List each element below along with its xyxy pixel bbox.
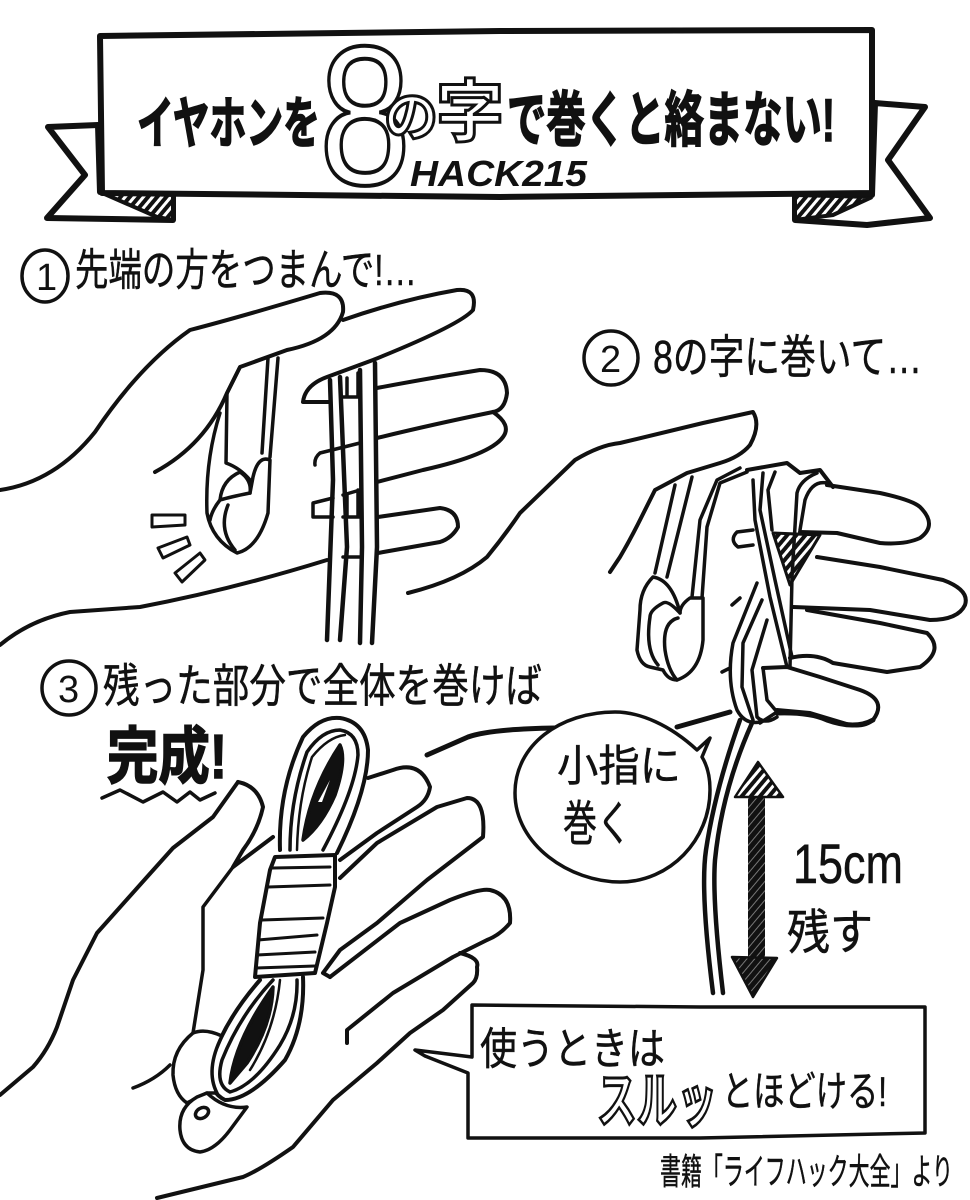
index finger <box>303 290 474 402</box>
wound cord strands <box>753 472 827 667</box>
step 1 illustration: hand pinching earphone <box>0 290 507 645</box>
finger stubs between cords <box>313 373 360 557</box>
double arrow: 15 cm length <box>732 762 783 997</box>
step number circle <box>22 250 68 302</box>
banner main panel <box>100 30 872 197</box>
hand back and thumb <box>408 412 756 593</box>
earphone bud hole <box>193 1105 211 1121</box>
step number: 3 <box>58 669 79 711</box>
index finger <box>800 485 929 543</box>
callout big word: スルッ <box>597 1068 717 1135</box>
earphone cords <box>226 358 278 480</box>
ring finger <box>790 610 935 672</box>
step 2 illustration: hand with figure eight winding <box>408 412 966 993</box>
callout bubble <box>515 712 710 882</box>
middle finger <box>323 798 483 977</box>
thumb and arm <box>0 782 238 1095</box>
earphone cords <box>655 468 747 598</box>
banner left fold shading <box>100 192 173 220</box>
wrapped band <box>255 855 335 977</box>
callout panel <box>415 1005 925 1138</box>
little finger <box>763 667 878 725</box>
hack number: HACK215 <box>410 153 588 194</box>
lower wound loop <box>210 977 303 1100</box>
hatched gap between fingers <box>773 533 820 585</box>
palm inner edge <box>193 867 233 1033</box>
step text: 残った部分で全体を巻けば <box>103 660 542 712</box>
step 3 illustration: hand holding wound earphone <box>0 718 510 1198</box>
banner left ribbon tail <box>47 125 173 220</box>
earphone bud front <box>180 1093 247 1152</box>
title outlined ji: 字 <box>436 75 504 151</box>
upper wound loop <box>280 718 368 853</box>
ring finger <box>377 412 506 482</box>
callout: little finger <box>515 712 710 882</box>
callout line 1: 使うときは <box>480 1025 665 1074</box>
earphone bud <box>173 1031 222 1103</box>
title text part one: イヤホンを <box>137 92 320 155</box>
wrist stub <box>133 1065 170 1088</box>
step number: 1 <box>36 257 57 299</box>
hanging cords <box>327 363 377 643</box>
wrist line <box>427 712 873 755</box>
arrow head down <box>732 957 777 997</box>
little finger and lower hand <box>157 953 477 1198</box>
step number: 2 <box>600 339 621 381</box>
complete label <box>102 723 227 802</box>
step 2 heading <box>584 331 922 385</box>
banner right fold shading <box>795 195 872 220</box>
step number circle <box>42 661 96 715</box>
motion lines icon <box>152 515 205 582</box>
complete text: 完成! <box>107 723 227 792</box>
tail cord <box>704 720 752 993</box>
title outlined no: の <box>384 88 438 148</box>
lower loop dark centre <box>230 987 273 1083</box>
earphone bud <box>207 413 270 553</box>
callout text line 1: 小指に <box>557 743 681 791</box>
wavy underline <box>102 790 215 802</box>
step text: 先端の方をつまんで!… <box>75 246 417 295</box>
label: leave 15 cm <box>787 832 903 960</box>
step number circle <box>584 331 638 385</box>
finger stub <box>733 530 753 547</box>
index finger <box>340 767 430 860</box>
hand back and thumb <box>0 293 343 490</box>
little finger <box>378 508 458 553</box>
step 3 heading <box>42 660 542 715</box>
upper loop dark centre <box>303 745 343 840</box>
arrow shaft <box>748 797 765 959</box>
middle finger <box>377 370 507 438</box>
callout text line 2: 巻く <box>563 798 631 851</box>
middle finger <box>793 557 966 620</box>
banner right ribbon tail <box>795 103 930 225</box>
ring finger <box>330 890 510 1043</box>
big outlined 8: 8 <box>319 5 411 226</box>
leave text: 残す <box>787 907 873 960</box>
lower palm <box>0 560 327 645</box>
callout line 2: とほどける! <box>722 1068 887 1115</box>
knuckle line <box>747 463 833 487</box>
step 1 heading <box>22 246 417 302</box>
length value: 15cm <box>793 832 903 895</box>
earphone bud <box>637 577 703 680</box>
arrow head up <box>735 762 783 797</box>
title banner <box>47 5 930 226</box>
callout box: easy to undo <box>415 1005 925 1138</box>
strands around little finger <box>722 583 777 722</box>
